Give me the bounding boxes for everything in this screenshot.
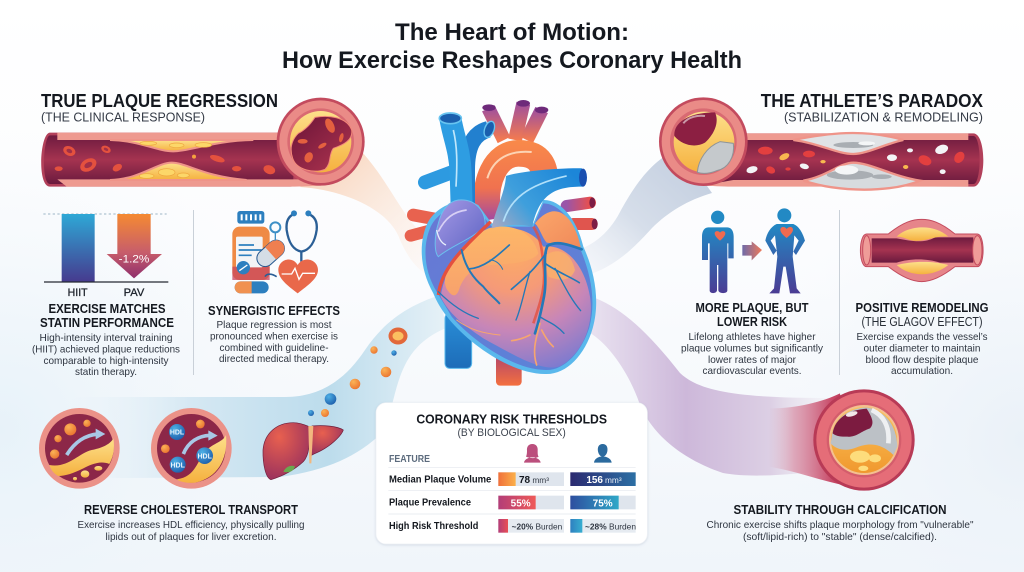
text: positive remodeling: POSITIVE REMODELING [856,300,988,315]
text: more plaque, but lower risk: cardiovascular events. [702,365,802,377]
illustration: positive remodeling vessel [860,219,983,282]
text: positive remodeling: outer diameter to maintain [864,342,981,354]
illustration: artery with calcified plaque [659,97,983,190]
illustration: anatomical heart [411,100,598,386]
bar chart: HIIT vs PAV: -1.2% [119,254,150,266]
text: stability through calcification: Chronic exercise shifts plaque morphology from "vulnerable" [706,519,974,531]
panel: coronary risk thresholds table: FEATURE [389,454,430,465]
ribbon: peach connector from plaque regression vessel to heart [300,153,432,277]
panel: coronary risk thresholds table: 156 [586,475,603,486]
heading: true plaque regression: TRUE PLAQUE REGRESSION [41,91,278,111]
icon: lipid particles travelling to liver [308,328,408,417]
icon: medication and stethoscope [232,210,318,293]
icon: reverse cholesterol transport circles [39,408,232,489]
panel: coronary risk thresholds table: High Risk Threshold [389,521,478,532]
icon: reverse cholesterol transport circles: HDL [197,453,213,460]
panel: coronary risk thresholds table: Median Plaque Volume [389,475,492,486]
text: reverse cholesterol transport: REVERSE CHOLESTEROL TRANSPORT [84,502,298,517]
panel: coronary risk thresholds table: mm³ [605,475,622,485]
text: exercise matches statin performance: comparable to high-intensity [44,355,169,367]
panel: coronary risk thresholds table: ~28% Burden [585,522,636,532]
text: synergistic effects: combined with guideline- [220,342,329,354]
panel: coronary risk thresholds table: CORONARY RISK THRESHOLDS [416,412,607,426]
text: more plaque, but lower risk: plaque volumes but significantly [681,342,824,354]
heading: the athlete's paradox: (STABILIZATION & REMODELING) [784,110,983,124]
ribbon: purple connector from heart to calcification vessel [590,298,830,476]
text: reverse cholesterol transport: lipids out of plaques for liver excretion. [106,531,276,543]
icon: reverse cholesterol transport circles: HDL [170,430,185,437]
panel: coronary risk thresholds table: ~20% Burden [512,522,563,532]
bar chart: HIIT vs PAV: PAV [124,287,145,299]
text: more plaque, but lower risk: MORE PLAQUE, BUT [696,300,809,315]
text: synergistic effects: SYNERGISTIC EFFECTS [208,303,340,318]
illustration: narrowed artery with lipid plaque [41,98,365,187]
panel: coronary risk thresholds table [376,403,647,544]
text: exercise matches statin performance: High-intensity interval training [40,332,173,344]
panel: coronary risk thresholds table: 75% [593,498,613,509]
text: exercise matches statin performance: statin therapy. [75,366,137,378]
panel: coronary risk thresholds table: 78 [519,475,531,486]
title: How Exercise Reshapes Coronary Health [282,47,742,74]
bar chart: HIIT vs PAV [43,214,168,299]
text: exercise matches statin performance [32,301,180,378]
ribbon: blue connector from heart to liver [54,295,446,478]
heading: the athlete's paradox [761,91,983,124]
illustration: calcified artery cross-section [768,389,915,491]
icon: reverse cholesterol transport circles: HDL [170,462,186,469]
text: exercise matches statin performance: (HIIT) achieved plaque reductions [32,344,180,356]
text: exercise matches statin performance: EXERCISE MATCHES [48,301,166,316]
text: synergistic effects [208,303,340,365]
text: synergistic effects: directed medical therapy. [219,353,329,365]
text: exercise matches statin performance: STATIN PERFORMANCE [40,315,174,330]
text: stability through calcification: STABILITY THROUGH CALCIFICATION [734,502,946,517]
panel: coronary risk thresholds table: 55% [511,498,531,509]
text: reverse cholesterol transport [78,502,305,543]
text: stability through calcification [706,502,974,543]
text: more plaque, but lower risk: lower rates of major [708,354,796,366]
text: stability through calcification: (soft/lipid-rich) to "stable" (dense/calcified). [743,531,937,543]
text: positive remodeling [856,300,988,377]
icon: liver [263,423,343,480]
text: synergistic effects: Plaque regression is most [216,319,332,331]
title [282,19,742,74]
title: The Heart of Motion: [395,19,629,46]
panel: coronary risk thresholds table: Plaque Prevalence [389,498,471,509]
text: positive remodeling: Exercise expands the vessel’s [856,331,988,343]
icon: person to athlete comparison [702,208,805,293]
text: synergistic effects: pronounced when exercise is [210,330,338,342]
heading: the athlete's paradox: THE ATHLETE’S PARADOX [761,91,983,111]
text: positive remodeling: accumulation. [891,365,953,377]
panel: coronary risk thresholds table: mm³ [532,475,549,485]
ribbon: grey-blue connector from athlete vessel to heart [570,148,712,278]
heading: true plaque regression: (THE CLINICAL RESPONSE) [41,110,205,124]
text: positive remodeling: (THE GLAGOV EFFECT) [862,314,982,329]
text: more plaque, but lower risk [681,300,824,377]
panel: coronary risk thresholds table: (BY BIOLOGICAL SEX) [457,427,566,439]
heading: true plaque regression [41,91,278,124]
text: more plaque, but lower risk: Lifelong athletes have higher [688,331,816,343]
bar chart: HIIT vs PAV: HIIT [68,287,88,299]
text: reverse cholesterol transport: Exercise increases HDL efficiency, physically pulling [78,519,305,531]
text: positive remodeling: blood flow despite plaque [866,354,979,366]
text: more plaque, but lower risk: LOWER RISK [717,314,788,329]
